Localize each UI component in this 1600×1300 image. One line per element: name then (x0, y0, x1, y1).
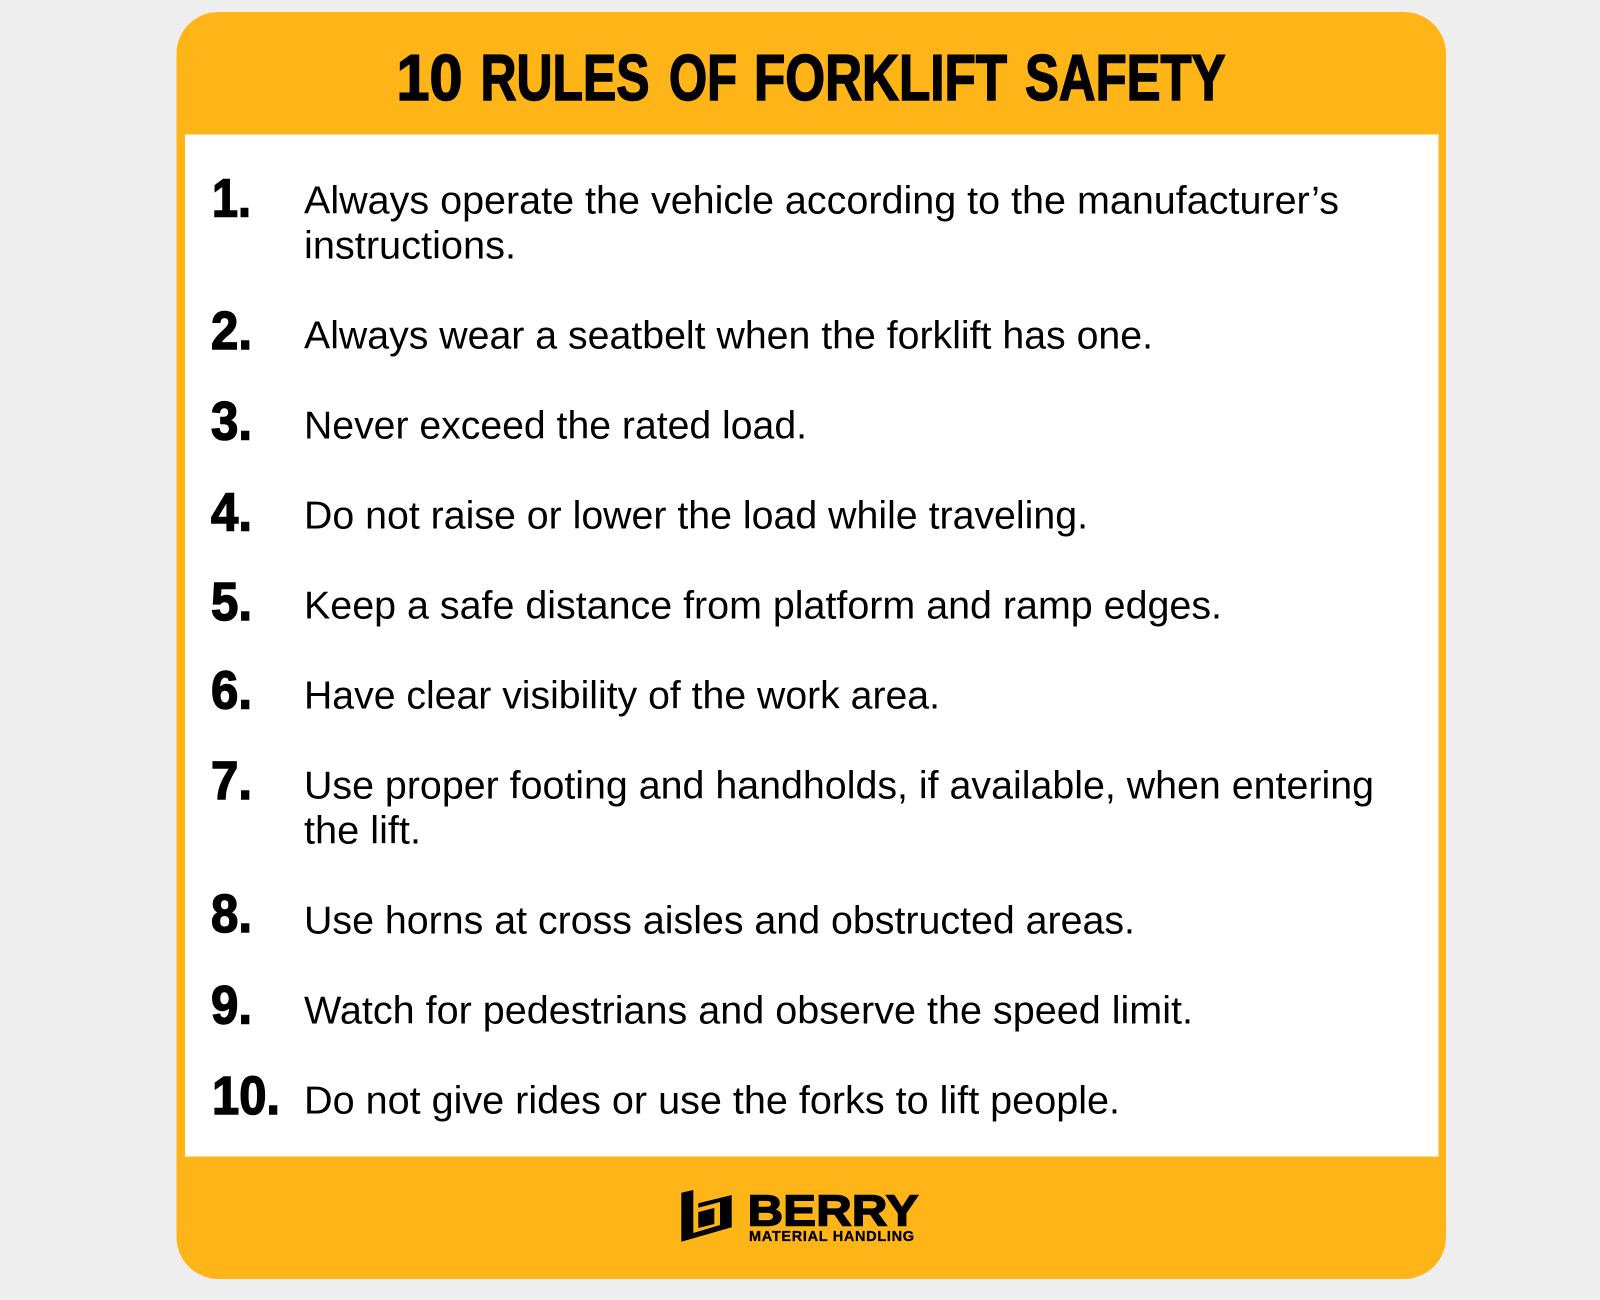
rule 9 (211, 976, 1193, 1036)
title: SAFETY (1025, 41, 1226, 114)
title (396, 41, 1226, 114)
rule 1 (212, 168, 1339, 268)
title: 10 (396, 41, 462, 114)
rule 4: Do not raise or lower the load while traveling. (304, 494, 1088, 538)
title: FORKLIFT (754, 41, 1007, 114)
rule 10: 10. (212, 1066, 280, 1126)
rule 3: Never exceed the rated load. (304, 404, 807, 448)
panel: white rules area (185, 134, 1438, 1156)
rule 4: 4. (211, 482, 252, 542)
logo wordmark: BERRY (748, 1186, 918, 1235)
rule 9: Watch for pedestrians and observe the speed limit. (304, 990, 1193, 1033)
rule 2: Always wear a seatbelt when the forklift has one. (304, 314, 1153, 358)
rule 2: 2. (211, 301, 252, 361)
title: RULES (480, 41, 650, 114)
rule 5: Keep a safe distance from platform and ramp edges. (304, 585, 1222, 628)
rule 7: the lift. (304, 810, 421, 853)
rule 4 (211, 482, 1088, 542)
rule 7: 7. (211, 751, 252, 811)
rule 3 (211, 392, 807, 452)
rule 7: Use proper footing and handholds, if available, when entering (304, 765, 1374, 808)
rule 9: 9. (211, 976, 252, 1036)
rule 6 (211, 660, 940, 720)
panel: orange card (176, 12, 1446, 1279)
rule 2 (211, 301, 1153, 361)
rule 5 (211, 572, 1222, 632)
title: OF (669, 41, 737, 114)
rule 5: 5. (211, 572, 252, 632)
rule 6: Have clear visibility of the work area. (304, 675, 940, 718)
logo tagline: MATERIAL HANDLING (749, 1229, 914, 1245)
rule 7 (211, 751, 1374, 853)
rule 3: 3. (211, 392, 252, 452)
rule 6: 6. (211, 660, 252, 720)
logo: Berry Material Handling (681, 1186, 918, 1245)
rule 1: instructions. (304, 225, 516, 268)
rule 8 (211, 884, 1135, 944)
rule 8: Use horns at cross aisles and obstructed areas. (304, 900, 1135, 943)
icon: logo mark (681, 1190, 732, 1242)
rule 10: Do not give rides or use the forks to lift people. (304, 1080, 1120, 1122)
rule 1: Always operate the vehicle according to the manufacturer’s (304, 180, 1339, 223)
rule 1: 1. (212, 168, 251, 228)
rule 10 (212, 1066, 1120, 1126)
rule 8: 8. (211, 884, 252, 944)
